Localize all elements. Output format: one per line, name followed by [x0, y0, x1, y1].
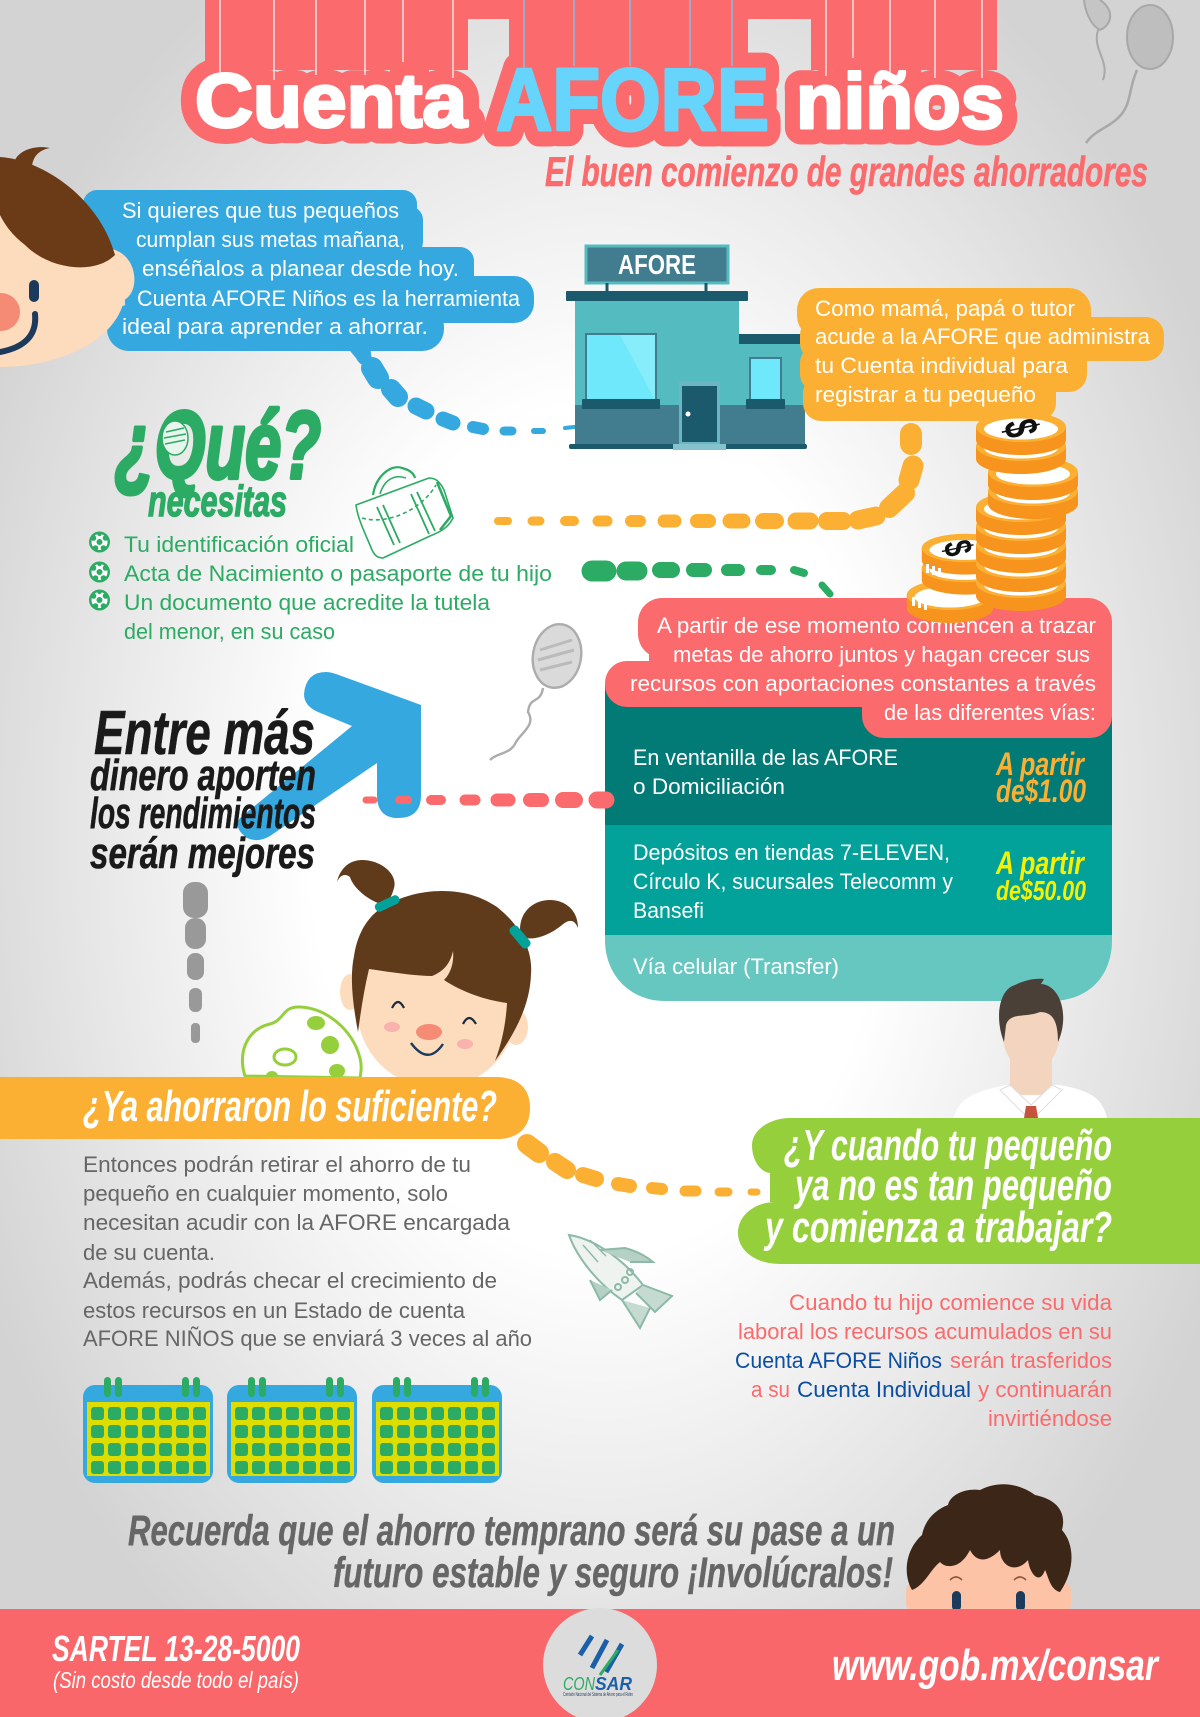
icon: AFORE building [566, 246, 807, 450]
arrow: orange dashed path to green bubble [527, 1144, 757, 1192]
panel: contribution channels: Círculo K, sucursales Telecomm y [633, 869, 953, 894]
icon: sketched school bag [356, 467, 453, 558]
arrow: blue dashed path [372, 368, 574, 431]
banner: ¿Ya ahorraron lo suficiente? [0, 1077, 530, 1139]
icon: sketched balloons top right [1084, 0, 1173, 143]
text: Entre más dinero aporten: los rendimientos [90, 789, 316, 838]
arrow: red dashed path [366, 796, 606, 804]
text: transfer explanation: y continuarán [978, 1377, 1112, 1402]
panel: contribution channels: A partir [995, 746, 1085, 782]
icon: sketched grey balloon [490, 620, 586, 760]
logo: CONSAR [543, 1608, 657, 1717]
logo: CONSAR: Comisión Nacional del Sistema de Ahorro para el Retiro [563, 1692, 633, 1698]
panel: orange speech bubble: registrar a tu pequeño [815, 382, 1036, 407]
icon: coin stacks: $ [993, 414, 1048, 442]
header: red castle band [205, 0, 997, 70]
panel: contribution channels: o Domiciliación [633, 774, 785, 799]
footer: phone contact: SARTEL 13-28-5000 [52, 1628, 300, 1669]
list: required documents: Acta de Nacimiento o pasaporte de tu hijo [124, 561, 552, 586]
text: Entre más dinero aporten: serán mejores [90, 829, 315, 878]
character: boy head top left [0, 147, 134, 367]
icon: AFORE building: AFORE [618, 249, 696, 280]
character: girl with pigtails [337, 860, 578, 1088]
panel: orange speech bubble: tu Cuenta individual para [815, 353, 1069, 378]
text: closing message [128, 1507, 895, 1597]
list: required documents: Un documento que acredite la tutela [124, 590, 491, 615]
panel: green question bubble [738, 1118, 1200, 1264]
text: withdrawal explanation: Entonces podrán retirar el ahorro de tu [83, 1152, 471, 1177]
list: required documents [89, 532, 552, 644]
panel: orange speech bubble: acude a la AFORE que administra [815, 324, 1151, 349]
icon: paint palette [242, 1007, 361, 1081]
title: Cuenta AFORE niños: AFORE [496, 50, 769, 149]
footer band [0, 1609, 1200, 1717]
title: Cuenta AFORE niños: AFORE [496, 50, 769, 149]
heading: ¿Qué? necesitas: necesitas [148, 477, 287, 526]
panel: blue speech bubble: enséñalos a planear desde hoy. [142, 256, 459, 281]
title: Cuenta AFORE niños: Cuenta [195, 59, 468, 144]
list: required documents: del menor, en su caso [124, 619, 335, 644]
text: withdrawal explanation: Además, podrás checar el crecimiento de [83, 1268, 497, 1293]
text: Entre más dinero aporten: Entre más [94, 699, 315, 768]
text: Entre más dinero aporten: dinero aporten [90, 751, 316, 800]
logo: CONSAR: CON [563, 1674, 596, 1694]
icon: sketched rocket [569, 1235, 672, 1328]
icon: three calendars [83, 1377, 502, 1483]
footer: phone contact [52, 1628, 300, 1693]
panel: contribution channels [605, 685, 1112, 1001]
panel: contribution channels: Vía celular (Transfer) [633, 954, 839, 979]
panel: blue speech bubble: Si quieres que tus pequeños [122, 198, 399, 223]
panel: blue speech bubble: cumplan sus metas mañana, [136, 227, 405, 252]
panel: contribution channels: En ventanilla de las AFORE [633, 745, 898, 770]
title: Cuenta AFORE niños [195, 0, 1004, 149]
text: transfer explanation: Cuando tu hijo comience su vida [789, 1290, 1113, 1315]
arrow: orange dashed path [498, 434, 913, 521]
icon: coin stacks: $ [934, 537, 980, 560]
panel: contribution channels: de$1.00 [996, 773, 1086, 809]
footer: phone contact: (Sin costo desde todo el país) [53, 1667, 299, 1693]
text: transfer explanation: Cuenta Individual [797, 1377, 971, 1402]
heading: ¿Qué? necesitas [115, 392, 321, 526]
panel: contribution channels: Depósitos en tiendas 7-ELEVEN, [633, 840, 950, 865]
text: closing message: Recuerda que el ahorro temprano será su pase a un [128, 1507, 895, 1555]
panel: blue speech bubble: ideal para aprender a ahorrar. [122, 314, 428, 339]
text: transfer explanation [735, 1290, 1113, 1431]
panel: red speech bubble: recursos con aportaciones constantes a través [630, 671, 1096, 696]
panel: red speech bubble: A partir de ese momento comiencen a trazar [657, 613, 1096, 638]
icon: big blue arrow up [238, 672, 421, 840]
text: Entre más dinero aporten [90, 699, 316, 878]
text: withdrawal explanation: pequeño en cualquier momento, solo [83, 1181, 448, 1206]
icon: coin stacks [907, 412, 1078, 623]
title: Cuenta AFORE niños: niños [796, 57, 1004, 145]
panel: contribution channels: de$50.00 [996, 875, 1086, 906]
panel: orange speech bubble: Como mamá, papá o tutor [815, 296, 1075, 321]
banner: ¿Ya ahorraron lo suficiente?: ¿Ya ahorraron lo suficiente? [83, 1082, 497, 1131]
character: curly-haired boy peeking [906, 1484, 1072, 1618]
text: transfer explanation: serán trasferidos [950, 1348, 1112, 1373]
list: required documents: Tu identificación oficial [124, 532, 354, 557]
text: transfer explanation: a su [751, 1377, 790, 1402]
text: transfer explanation: laboral los recursos acumulados en su [738, 1319, 1112, 1344]
heading: ¿Qué? necesitas: ¿Qué? [115, 392, 321, 499]
panel: red speech bubble: metas de ahorro juntos y hagan crecer sus [673, 642, 1090, 667]
text: withdrawal explanation: estos recursos en un Estado de cuenta [83, 1298, 466, 1323]
text: closing message: futuro estable y seguro ¡Involúcralos! [333, 1549, 893, 1597]
text: transfer explanation: Cuenta AFORE Niños [735, 1348, 942, 1373]
text: transfer explanation: invirtiéndose [988, 1406, 1112, 1431]
panel: blue speech bubble: Cuenta AFORE Niños es la herramienta [137, 286, 521, 311]
logo: CONSAR: SAR [595, 1674, 632, 1694]
panel: red speech bubble [605, 598, 1112, 738]
panel: contribution channels: Bansefi [633, 898, 704, 923]
text: withdrawal explanation: de su cuenta. [83, 1240, 215, 1265]
panel: contribution channels: A partir [995, 845, 1085, 881]
panel: blue speech bubble [83, 190, 534, 365]
text: withdrawal explanation: AFORE NIÑOS que se enviará 3 veces al año [83, 1326, 532, 1351]
panel: red speech bubble: de las diferentes vías: [884, 700, 1096, 725]
arrow: grey dashed path [183, 882, 208, 1043]
arrow: green dashed path [592, 570, 830, 594]
character: man in shirt and tie [954, 979, 1107, 1118]
text: withdrawal explanation: necesitan acudir con la AFORE encargada [83, 1210, 511, 1235]
text: withdrawal explanation [83, 1152, 532, 1351]
title: Cuenta AFORE niños: Cuenta [195, 59, 468, 144]
panel: orange speech bubble [797, 288, 1164, 421]
icon: balloon inside Q [162, 421, 188, 455]
title: Cuenta AFORE niños: niños [796, 57, 1004, 145]
